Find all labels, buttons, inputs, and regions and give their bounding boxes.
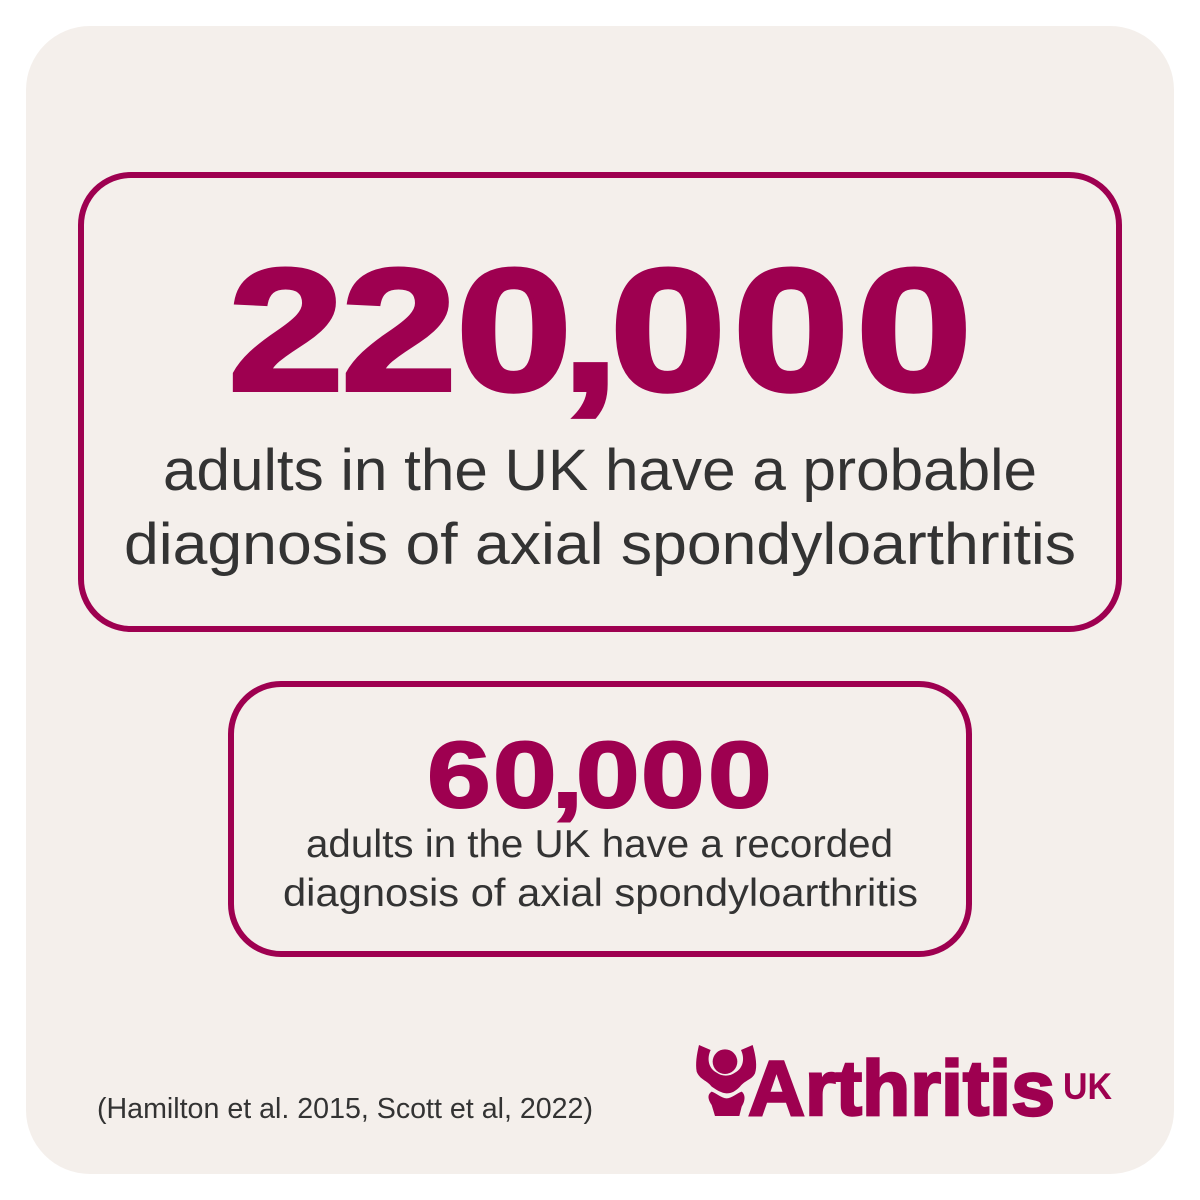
logo: Arthritis UK	[696, 1044, 1112, 1132]
description: recorded diagnosis	[283, 823, 918, 915]
description: recorded diagnosis: diagnosis of axial spondyloarthritis	[283, 872, 918, 915]
description: probable diagnosis	[124, 438, 1076, 577]
big number: 60,000: 60,000	[427, 723, 772, 828]
description: recorded diagnosis: adults in the UK have a recorded	[306, 823, 893, 866]
description: probable diagnosis: adults in the UK have a probable	[163, 438, 1037, 503]
wordmark: Arthritis	[748, 1044, 1055, 1132]
citation: (Hamilton et al. 2015, Scott et al, 2022)	[97, 1093, 593, 1125]
panel border	[231, 684, 969, 954]
panel: recorded diagnosis	[231, 684, 969, 954]
panel: probable diagnosis	[81, 175, 1119, 629]
big number: 220,000: 220,000	[228, 232, 972, 427]
panel border	[81, 175, 1119, 629]
wordmark suffix: UK	[1063, 1066, 1112, 1107]
description: probable diagnosis: diagnosis of axial spondyloarthritis	[124, 512, 1076, 577]
icon: figure with raised arms	[696, 1045, 756, 1116]
